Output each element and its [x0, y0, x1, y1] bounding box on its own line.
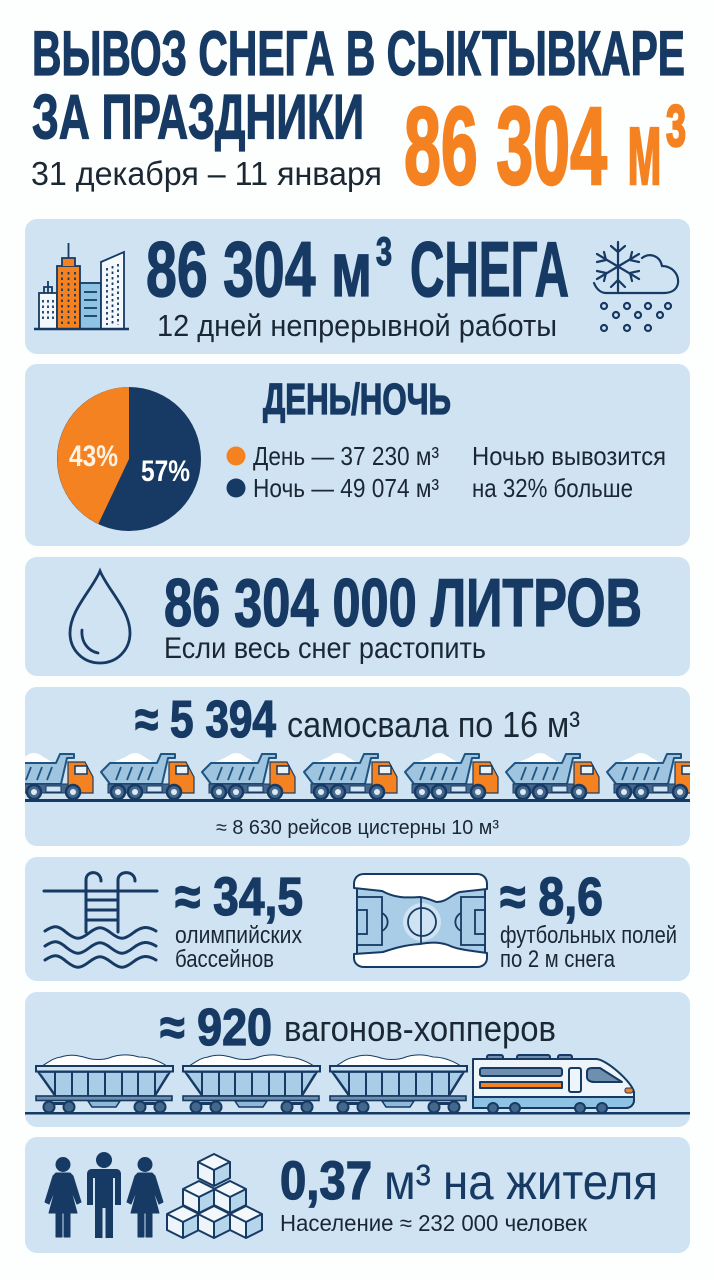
icon: snowy football field — [354, 874, 487, 967]
date range: 31 декабря – 11 января — [31, 155, 382, 192]
heading: wagon count: вагонов-хопперов — [284, 1008, 556, 1049]
panel: per resident — [25, 1137, 690, 1253]
pie chart: 57% — [141, 455, 190, 488]
panel: pools and fields — [25, 857, 690, 981]
icon: locomotive — [473, 1055, 634, 1113]
icon: people — [45, 1152, 163, 1238]
panel: total snow — [25, 219, 690, 354]
heading: truck count: самосвала по 16 м³ — [287, 704, 580, 745]
text: population: Население ≈ 232 000 человек — [280, 1210, 588, 1236]
pie chart: 43% — [69, 440, 118, 473]
panel: day and night — [25, 364, 690, 546]
heading: wagon count — [160, 999, 556, 1057]
heading: day night: ДЕНЬ/НОЧЬ — [263, 375, 451, 424]
heading: truck count: ≈ 5 394 — [135, 691, 276, 749]
stat: fields — [500, 867, 677, 973]
pie chart — [57, 387, 201, 531]
text: tanker trips: ≈ 8 630 рейсов цистерны 10 м³ — [216, 817, 499, 839]
heading: total volume: 3 — [376, 230, 392, 274]
stat: pools — [175, 867, 303, 973]
panel: litres — [25, 557, 690, 676]
heading: per resident: 0,37 — [280, 1151, 372, 1211]
panel: hopper wagons — [25, 992, 690, 1127]
stat: fields: по 2 м снега — [500, 946, 616, 973]
wagon row — [36, 1055, 467, 1112]
title: ЗА ПРАЗДНИКИ — [32, 82, 364, 152]
heading: total volume: СНЕГА — [410, 225, 569, 313]
icon: snowflake and cloud — [594, 242, 678, 331]
text: if melted: Если весь снег растопить — [164, 632, 486, 665]
icon: city buildings — [34, 243, 129, 329]
stat: fields: футбольных полей — [500, 922, 677, 949]
panel: dump trucks — [0, 687, 700, 846]
icon: water drop — [70, 571, 130, 663]
text: night comparison — [472, 441, 666, 503]
stat: fields: ≈ 8,6 — [500, 867, 603, 927]
truck row — [0, 753, 700, 799]
legend: day: День — 37 230 м³ — [253, 441, 439, 471]
text: night comparison: Ночью вывозится — [472, 441, 666, 471]
stat: pools: ≈ 34,5 — [175, 867, 303, 927]
text: night comparison: на 32% больше — [472, 473, 633, 503]
heading: per resident — [280, 1151, 658, 1211]
icon: stacked cubes — [167, 1154, 262, 1238]
stat: pools: бассейнов — [175, 946, 274, 973]
heading: truck count — [135, 691, 580, 749]
headline total: 3 — [666, 94, 686, 159]
title — [32, 19, 685, 152]
stat: pools: олимпийских — [175, 922, 302, 949]
headline total: м — [627, 89, 662, 207]
text: work duration: 12 дней непрерывной работы — [157, 308, 557, 343]
heading: per resident: на жителя — [443, 1154, 658, 1210]
heading: total volume: 86 304 м — [146, 225, 372, 313]
heading: per resident: м³ — [384, 1154, 431, 1210]
heading: wagon count: ≈ 920 — [160, 999, 272, 1057]
icon: swimming pool — [44, 873, 157, 967]
legend: night: Ночь — 49 074 м³ — [253, 473, 439, 503]
